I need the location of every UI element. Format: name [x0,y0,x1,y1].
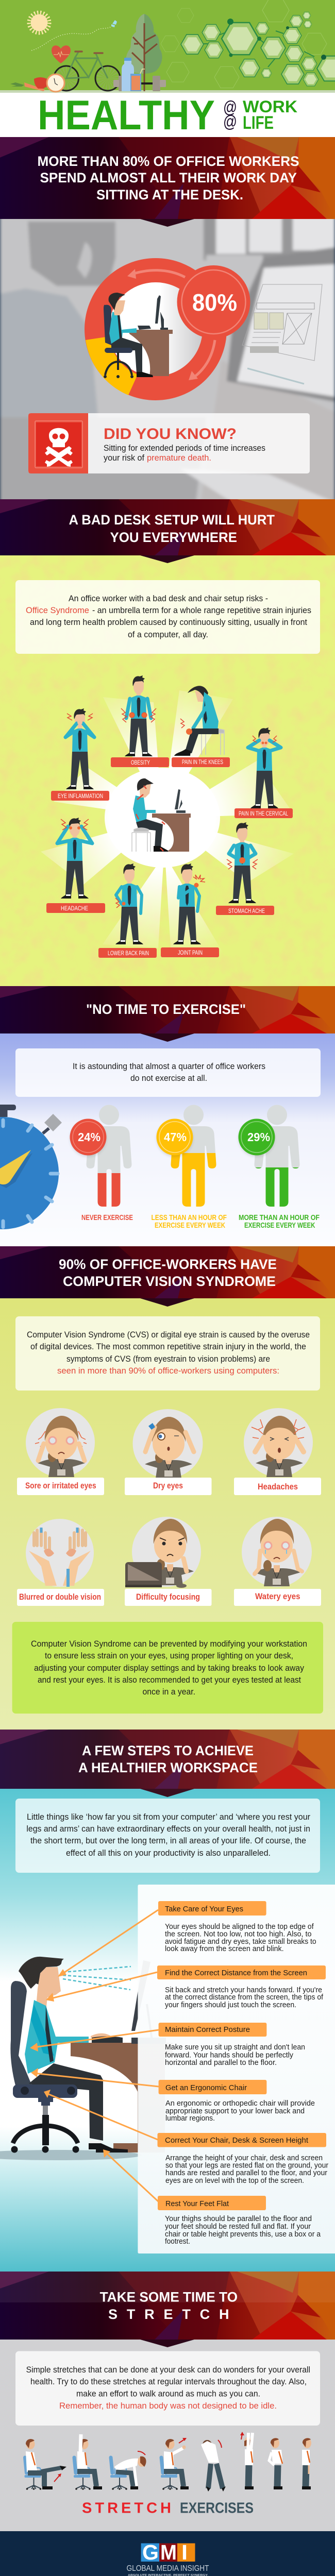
text: did you know: premature death. [147,453,211,463]
tip: correct distance: Sit back and stretch your hands forward. If you're [165,1986,322,1994]
tip: ergonomic chair: appropriate support to your lower back and [165,2107,305,2115]
tip: correct posture: Maintain Correct Posture [165,2025,250,2034]
callout: cvs prevention: adjusting your computer display settings and by taking breaks to look away [34,1664,305,1673]
figure: more than an hour 29% [238,1105,300,1207]
banner: computer vision syndrome: COMPUTER VISION SYNDROME [63,1274,276,1289]
callout: cvs prevention: Computer Vision Syndrome can be prevented by modifying your workstation [31,1639,307,1649]
icon: skull and crossbones [45,428,73,467]
banner: healthier workspace: A HEALTHIER WORKSPACE [78,1760,258,1775]
label: more than an hour [239,1214,320,1230]
title: LIFE [243,113,274,133]
label: less than an hour: EXERCISE EVERY WEEK [155,1222,225,1230]
tip: chair desk screen height [158,2133,328,2185]
tip: correct distance: your fingers should just touch the screen. [165,2001,296,2009]
tip: ergonomic chair [159,2080,315,2123]
title: @ [223,97,237,116]
panel: computer vision syndrome [0,1298,335,1730]
text box: exercise intro: It is astounding that almost a quarter of office workers [73,1062,265,1071]
panel: no time to exercise [0,1033,335,1246]
label: pain in the knees [172,757,230,767]
tip: ergonomic chair: lumbar regions. [165,2114,215,2123]
icon: stopwatch [0,1105,62,1229]
figure: stomach ache [227,822,258,903]
label: blurred vision: Blurred or double vision [19,1592,101,1602]
hexagon molecule graphic [161,0,335,88]
text box: exercise intro: do not exercise at all. [130,1074,207,1083]
text box: workspace intro: legs and arms’ can have extraordinary effects on your overall health, not just in [26,1824,310,1834]
heading: stretch exercises [82,2500,254,2517]
banner: bad desk setup: A BAD DESK SETUP WILL HURT [69,512,275,528]
label: headache: HEADACHE [61,906,88,912]
tip: rest your feet flat [158,2196,321,2246]
photo panel background [0,216,335,502]
label: pain in the cervical [234,808,293,818]
figure: pain in the cervical [248,727,281,808]
portrait: watery eyes [242,1517,312,1587]
portrait: headaches [244,1408,313,1477]
title: @ [223,112,237,131]
badge: 80% [177,265,250,338]
figure: never exercise 24% [70,1105,132,1207]
tip: correct posture: horizontal and parallel to the floor. [165,2059,277,2067]
portrait: difficulty focusing [125,1517,201,1588]
figure: less than an hour 47% [157,1105,216,1207]
text box: exercise intro [15,1048,321,1097]
label: stomach ache [216,906,274,915]
banner: no time to exercise: "NO TIME TO EXERCISE" [86,1002,246,1017]
label: blurred vision [17,1589,104,1606]
logo: GMI [141,2540,195,2564]
arrows: tips to body parts [30,1910,159,2201]
text box: office syndrome: - an umbrella term for a whole range repetitive strain injuries [92,606,311,615]
figure: headache [57,818,92,899]
tip: correct distance [157,1965,326,2009]
logo: GMI: I [181,2540,188,2564]
banner: healthier workspace: A FEW STEPS TO ACHIEVE [82,1743,254,1758]
text box: cvs intro: seen in more than 90% of office-workers using computers: [57,1366,279,1376]
figure: hands on hips stretch [269,2438,283,2489]
label: never exercise: NEVER EXERCISE [81,1214,133,1222]
text: did you know: Sitting for extended periods of time increases [104,444,265,453]
label: difficulty focusing: Difficulty focusing [136,1592,200,1602]
figure: standing neck stretch [302,2438,311,2489]
figure: more than an hour 29%: 29% [247,1130,270,1144]
banner: 80 percent statement: SPEND ALMOST ALL THEIR WORK DAY [40,170,297,185]
footer [0,2531,335,2576]
figure: never exercise 24%: 24% [78,1130,100,1144]
tip: rest your feet flat: your feet should be rested full and flat. If your [165,2223,311,2231]
figure: back bend stretch [201,2440,226,2492]
label: less than an hour [152,1214,227,1230]
tip: take care of your eyes: avoid fatigue and dry eyes, take small breaks to [165,1938,316,1946]
text box: workspace intro: effect of all this on your productivity is also unparalleled. [66,1849,271,1858]
text: company name: GLOBAL MEDIA INSIGHT [127,2564,209,2573]
chart: 80 percent ring [86,265,250,395]
banner: bad desk setup [0,499,335,563]
text box: stretch intro [15,2351,320,2426]
panel: tips [138,1885,335,2253]
label: less than an hour: LESS THAN AN HOUR OF [152,1214,227,1222]
title: HEALTHY [38,92,215,139]
banner: take some time to stretch: TAKE SOME TIME TO [100,2290,238,2305]
logo: GMI: G [142,2540,159,2564]
text box: workspace intro [15,1799,320,1873]
icon: bicycle [54,52,120,91]
icon: butterfly with dotted trail [31,20,117,50]
tip: correct distance: Find the Correct Distance from the Screen [165,1969,307,1977]
title [0,92,335,139]
callout: cvs prevention [12,1622,323,1714]
banner: healthier workspace [0,1730,335,1797]
tip: take care of your eyes: Your eyes should be aligned to the top edge of [165,1923,314,1931]
text box: office syndrome: and long term health problem caused by continuously sitting, usually in front [30,618,307,627]
title: WORK [243,97,297,116]
wireframe sketch on monitor [242,284,322,384]
label: dry eyes: Dry eyes [153,1481,183,1490]
text box: stretch intro: Simple stretches that can be done at your desk can do wonders for your overall [26,2365,310,2375]
label: stomach ache: STOMACH ACHE [228,908,265,914]
label: joint pain: JOINT PAIN [178,950,203,956]
tip: take care of your eyes [158,1901,316,1953]
figure: arm raise stretch [74,2434,102,2490]
icon: office worker at desk [104,293,173,378]
tip: rest your feet flat: chair or table height prevents this, use a box or a [165,2230,321,2239]
tip: correct posture [159,2023,305,2067]
figure: seated at desk [132,778,191,852]
tip: correct distance: at the correct distance from the screen, the tips of [165,1993,324,2002]
figure: eye inflammation [65,708,94,789]
text box: stretch intro: make an effort to walk around as much as you can. [76,2389,260,2399]
label: pain in the cervical: PAIN IN THE CERVICAL [239,811,288,817]
figure: less than an hour 47%: 47% [164,1130,187,1144]
figure: leg raise stretch [25,2439,66,2490]
label: lower back pain: LOWER BACK PAIN [108,951,149,957]
figure: pain in the knees [174,686,224,756]
text: did you know: your risk of [104,453,144,463]
banner: bad desk setup: YOU EVERYWHERE [110,530,237,545]
tip: ergonomic chair: Get an Ergonomic Chair [165,2083,247,2092]
icon: clock [47,74,64,92]
heading: stretch exercises: STRETCH [82,2500,171,2517]
label: more than an hour: EXERCISE EVERY WEEK [244,1222,315,1230]
tip: chair desk screen height: Correct Your Chair, Desk & Screen Height [165,2136,309,2145]
panel: healthier workspace [0,1789,335,2272]
callout: did you know [28,413,310,473]
icon: carrot and apple [10,77,47,91]
label: eye inflammation [51,791,109,801]
banner: 80 percent statement [0,137,335,227]
label: eye inflammation: EYE INFLAMMATION [58,793,103,800]
figure: arm forward stretch [161,2438,189,2490]
tip: chair desk screen height: so that your legs are rested flat on the ground, your [165,2162,328,2170]
illustration: correct sitting posture [0,1957,173,2160]
icon: heart [52,45,71,63]
callout: cvs prevention: and rest your eyes. It is also recommended to get your eyes tested at least [38,1675,301,1685]
banner: no time to exercise [0,986,335,1042]
figure: joint pain [173,863,205,944]
tip: correct posture: Make sure you sit up straight and don't lean [165,2043,305,2052]
text box: stretch intro: health. Try to do these stretches at regular intervals throughout the day. Also, [30,2377,307,2386]
text box: office syndrome: An office worker with a bad desk and chair setup risks - [69,594,268,603]
text box: cvs intro: symptoms of CVS (from eyestrain to vision problems) are [66,1354,270,1364]
text: company name [127,2564,209,2576]
icon: tree [126,14,162,91]
tip: take care of your eyes: the screen. Not too low, not too high. Also, to [165,1930,311,1939]
callout: cvs prevention: to ensure less strain on your eyes, using proper lighting on your desk, [45,1651,293,1660]
badge: 80%: 80% [192,289,237,316]
header illustration [0,0,335,93]
text box: workspace intro: Little things like ‘how far you sit from your computer’ and ‘where you rest your [27,1812,310,1822]
icon: water bottle [122,58,134,91]
tip: chair desk screen height: hands are rested and parallel to the floor, and your [165,2169,327,2177]
banner: take some time to stretch [0,2272,335,2347]
label: dry eyes [125,1478,211,1495]
tip: chair desk screen height: eyes are on level with the top of the screen. [165,2177,304,2185]
label: lower back pain [98,948,157,958]
label: headaches [234,1478,321,1495]
label: headaches: Headaches [258,1482,298,1492]
icon: sun [29,12,49,33]
label: headache [46,903,105,913]
figure: overhead stretch [240,2432,254,2489]
heading: stretch exercises: EXERCISES [180,2500,254,2517]
portrait: blurred vision [26,1519,94,1587]
label: sore eyes: Sore or irritated eyes [25,1481,96,1490]
tip: rest your feet flat: Rest Your Feet Flat [165,2199,229,2208]
text box: office syndrome: Office Syndrome [26,606,89,615]
label: obesity [111,757,169,767]
label: watery eyes [234,1589,321,1606]
banner: 80 percent statement: SITTING AT THE DESK. [96,187,243,202]
tip: take care of your eyes: look away from the screen and blink. [165,1945,284,1953]
icon: dumbbell [113,76,166,91]
tip: chair desk screen height: Arrange the height of your chair, desk and screen [165,2154,323,2162]
label: pain in the knees: PAIN IN THE KNEES [182,759,223,766]
logo: GMI: M [160,2540,177,2564]
banner: take some time to stretch: STRETCH [108,2307,229,2322]
text box: cvs intro: of digital devices. The most common repetitive strain injury in the world, the [30,1342,306,1351]
text box: cvs intro: Computer Vision Syndrome (CVS) or digital eye strain is caused by the overuse [27,1330,310,1340]
banner: computer vision syndrome [0,1246,335,1307]
text box: workspace intro: the short term, but over the long term, in all areas of your life. Of course, the [30,1836,306,1845]
banner: computer vision syndrome: 90% OF OFFICE-WORKERS HAVE [59,1257,277,1272]
label: obesity: OBESITY [131,760,150,766]
text box: office syndrome: of a computer, all day. [128,630,208,639]
label: sore eyes [17,1478,104,1495]
tip: rest your feet flat: Your thighs should be parallel to the floor and [165,2215,312,2223]
text: did you know: DID YOU KNOW? [104,426,237,443]
figure: lower back pain [115,863,143,944]
text: did you know [104,426,265,463]
label: watery eyes: Watery eyes [255,1592,300,1601]
callout: cvs prevention: once in a year. [142,1687,195,1697]
tip: correct posture: forward. Your hands should be perfectly [165,2052,294,2060]
tip: ergonomic chair: An ergonomic or orthopedic chair will provide [165,2099,315,2108]
text box: cvs intro [15,1316,320,1391]
tip: rest your feet flat: footrest. [165,2238,190,2246]
text box: stretch intro: Remember, the human body was not designed to be idle. [59,2401,277,2411]
panel: office syndrome [0,555,335,986]
figure: obesity [121,675,156,756]
text box: office syndrome [15,580,320,654]
light rays behind figures [41,690,294,955]
tip: take care of your eyes: Take Care of Your Eyes [165,1905,243,1913]
portrait: sore eyes [26,1408,95,1477]
figure: forward bend stretch [110,2451,146,2490]
panel: stretch exercises [0,2340,335,2531]
label: difficulty focusing [125,1589,211,1606]
banner: 80 percent statement: MORE THAN 80% OF OFFICE WORKERS [37,154,299,169]
label: more than an hour: MORE THAN AN HOUR OF [239,1214,320,1222]
label: joint pain [161,947,219,957]
icon: juice glass [130,69,145,91]
portrait: dry eyes [133,1409,203,1478]
